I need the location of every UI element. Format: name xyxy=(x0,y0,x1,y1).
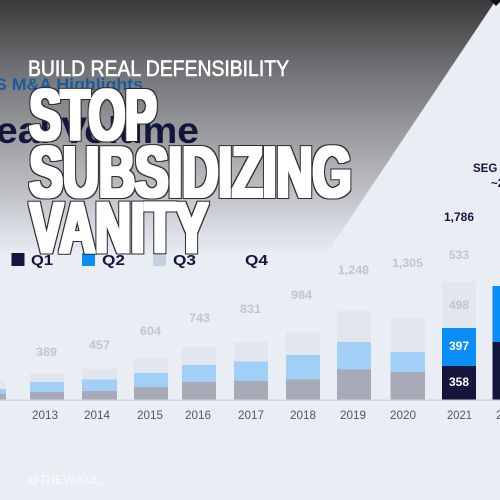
legend: Q4: Q4 xyxy=(245,253,268,269)
headline line: stop: STOP xyxy=(30,76,156,156)
bar: 2015 xyxy=(134,358,168,400)
value 397: 397 xyxy=(449,339,469,353)
year 2019: 2019 xyxy=(340,408,366,422)
total 831: 831 xyxy=(240,302,261,316)
bar: 2021 xyxy=(442,282,476,400)
year axis labels xyxy=(32,408,500,422)
bar: 2016 xyxy=(182,347,216,400)
watermark: @THEVAKUL. xyxy=(28,473,103,487)
value 358: 358 xyxy=(449,375,469,389)
dark diagonal gradient overlay xyxy=(0,0,496,256)
total 1,786: 1,786 xyxy=(444,210,474,224)
total 984: 984 xyxy=(291,288,312,302)
chart baseline xyxy=(0,400,500,401)
bar: 2022 partial xyxy=(492,286,500,400)
value 498: 498 xyxy=(449,298,469,312)
total 743: 743 xyxy=(189,311,210,325)
bar: 2012 partial xyxy=(0,381,6,400)
year 2014: 2014 xyxy=(84,408,110,422)
bar: 2017 xyxy=(234,342,268,400)
legend: Q3 xyxy=(153,253,196,269)
legend: Q3: Q3 xyxy=(173,253,196,269)
year 2016: 2016 xyxy=(185,408,211,422)
legend: Q1: Q1 xyxy=(31,253,53,269)
total 389: 389 xyxy=(36,345,57,359)
legend: Q1 xyxy=(12,253,53,269)
bar totals and values xyxy=(36,210,474,389)
bar: 2018 xyxy=(286,332,320,400)
year 2020: 2020 xyxy=(390,408,416,422)
headline line: subsidizing: SUBSIDIZING xyxy=(30,133,352,213)
value 533: 533 xyxy=(449,248,469,262)
headline line: vanity: VANITY xyxy=(30,188,208,268)
dark corner at top right xyxy=(490,0,500,6)
SEG annotation xyxy=(473,163,500,190)
legend: Q2 xyxy=(82,253,125,269)
total 1,248: 1,248 xyxy=(338,263,369,277)
kicker: build real defensibility: BUILD REAL DEFENSIBILITY xyxy=(28,56,289,81)
bar: 2014 xyxy=(82,369,117,400)
legend xyxy=(12,253,268,269)
chart heading: deal volume: eal Volume xyxy=(0,110,199,151)
year 2018: 2018 xyxy=(290,408,316,422)
bar: 2019 xyxy=(337,311,371,400)
headline xyxy=(30,76,352,268)
year 2015: 2015 xyxy=(137,408,163,422)
bar: 2013 xyxy=(30,373,64,400)
year 2021: 2021 xyxy=(447,408,472,422)
stacked bar chart xyxy=(0,282,500,401)
year 2017: 2017 xyxy=(238,408,264,422)
total 604: 604 xyxy=(140,324,161,338)
total 457: 457 xyxy=(89,338,110,352)
legend: Q2: Q2 xyxy=(102,253,125,269)
bar: 2020 xyxy=(390,318,425,400)
total 1,305: 1,305 xyxy=(392,256,423,270)
year 2013: 2013 xyxy=(32,408,58,422)
